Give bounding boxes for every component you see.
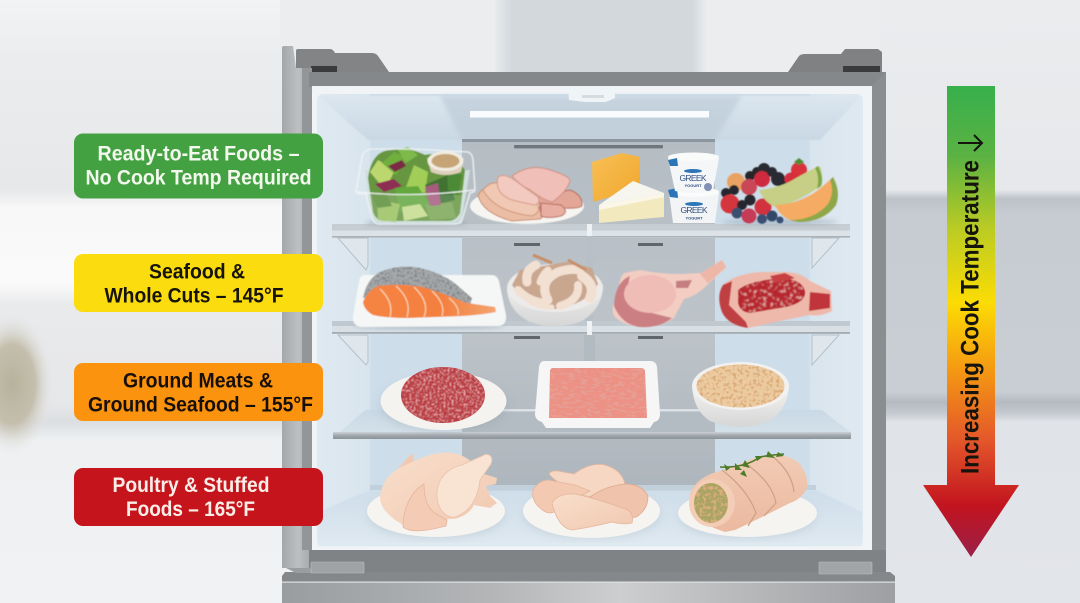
floor — [318, 490, 862, 546]
food: berries and melon — [720, 158, 838, 225]
label: poultry and stuffed foods: Poultry & Stuffed — [112, 473, 270, 497]
honeydew slice — [759, 166, 822, 208]
label: ground meats and ground seafood — [74, 363, 323, 421]
lower cup: YOGURT — [685, 216, 703, 220]
hinge right — [788, 49, 882, 72]
drumstick right — [590, 484, 648, 517]
left door frame — [282, 46, 309, 568]
chicken back wing tip — [395, 453, 416, 478]
ceiling — [319, 96, 861, 140]
dressing cup — [427, 151, 464, 175]
label: ready-to-eat foods: No Cook Temp Required — [86, 166, 312, 190]
food: mixed salad in clear box — [356, 147, 475, 226]
upper cup — [668, 152, 719, 193]
label: poultry and stuffed foods: Foods – 165°F — [126, 497, 255, 521]
chicken body — [380, 453, 497, 531]
temperature gradient arrow — [923, 86, 1019, 557]
top shelf — [332, 224, 850, 321]
label: ready-to-eat foods — [74, 134, 323, 198]
clear box rim — [356, 149, 475, 224]
refrigerator interior — [312, 86, 872, 550]
upper cup: GREEK — [680, 173, 707, 183]
food: whole raw chicken on plate — [367, 453, 505, 537]
chicken wing — [403, 484, 447, 531]
food: salmon fillet on white tray — [353, 267, 506, 329]
hinge left — [296, 49, 389, 72]
label: poultry and stuffed foods — [74, 468, 323, 526]
top frame — [309, 72, 886, 87]
label: ready-to-eat foods: Ready-to-Eat Foods – — [98, 142, 300, 166]
bottom frame — [309, 550, 886, 574]
food: cheddar wedge — [592, 153, 640, 202]
label: seafood and whole cuts: Seafood & — [149, 260, 245, 284]
herb sprig — [720, 451, 784, 477]
lower hinges — [286, 562, 872, 574]
upper cup: YOGURT — [684, 183, 702, 188]
food: ground beef patty on plate — [380, 367, 506, 430]
chicken thigh and leg — [437, 454, 492, 517]
label: ground meats and ground seafood: Ground Meats & — [123, 368, 273, 392]
ceiling centre — [440, 96, 742, 140]
food: shrimp in white bowl — [507, 255, 603, 326]
middle shelf — [332, 321, 850, 365]
food: brie wedge — [599, 181, 664, 223]
label: seafood and whole cuts — [74, 254, 323, 312]
right frame — [872, 72, 886, 573]
food: pork rib chop — [613, 260, 726, 327]
label: seafood and whole cuts: Whole Cuts – 145°F — [104, 284, 284, 308]
bottom glass shelf — [333, 409, 851, 439]
food: ribeye steak — [719, 272, 832, 328]
cantaloupe slice — [775, 177, 837, 222]
food: ground meat in tray — [535, 361, 660, 428]
lower cup: GREEK — [680, 205, 708, 215]
drumstick front — [552, 494, 632, 530]
small direction arrow — [958, 135, 982, 151]
lower cup — [668, 187, 719, 223]
base unit — [282, 572, 895, 603]
label: ground meats and ground seafood: Ground Seafood – 155°F — [88, 392, 313, 416]
arrow caption: Increasing Cook Temperature — [956, 160, 984, 474]
ceiling light bar — [470, 111, 709, 118]
rear panel — [462, 139, 715, 491]
refrigerator cabinet — [282, 46, 895, 603]
air vent — [568, 87, 615, 102]
drumstick left — [533, 480, 590, 513]
food: stuffing in white bowl — [692, 362, 789, 427]
food: Greek yogurt cups — [668, 152, 719, 223]
drumstick top — [549, 464, 625, 497]
food: sliced ham on plate — [470, 168, 584, 224]
food: raw chicken drumsticks on plate — [523, 464, 660, 538]
food: stuffed rolled roast on plate — [678, 451, 817, 537]
